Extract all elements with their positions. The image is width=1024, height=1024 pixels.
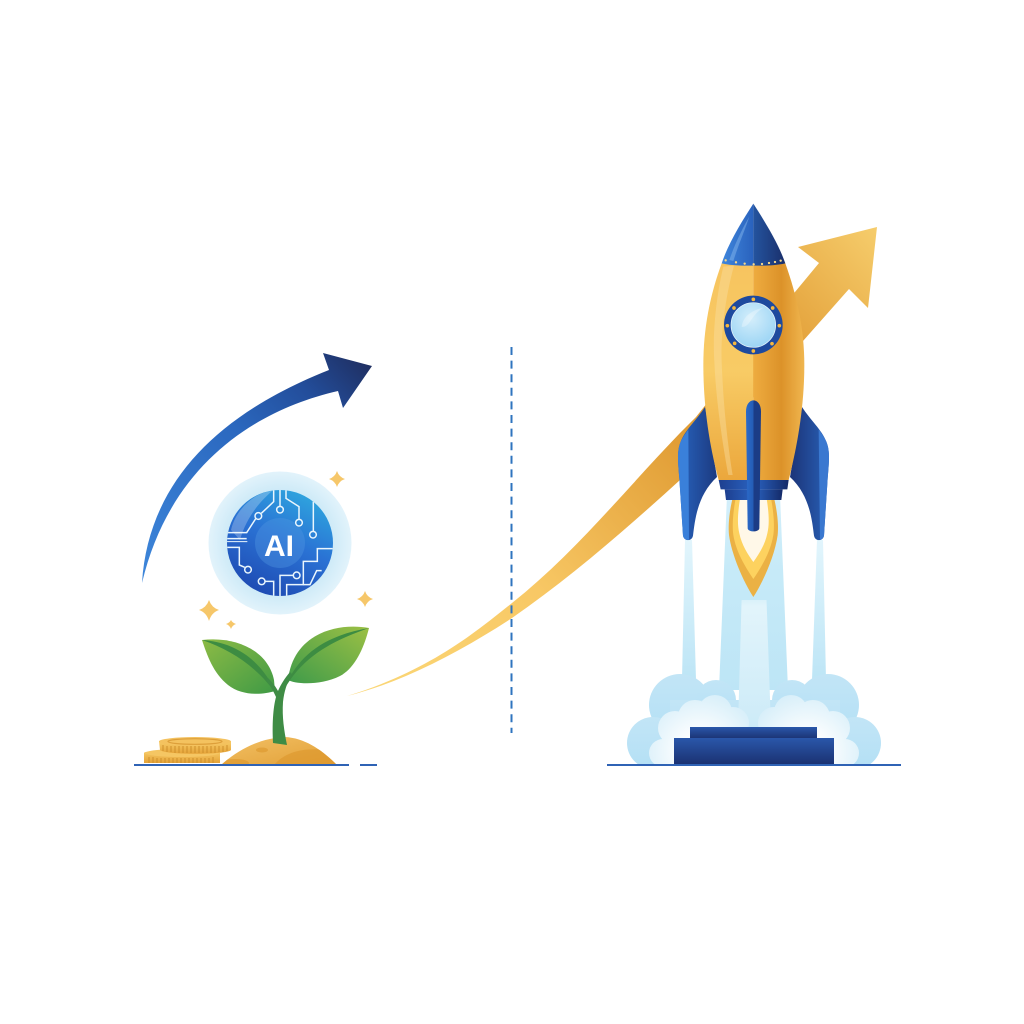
center fin	[746, 400, 761, 531]
exhaust beams	[682, 495, 826, 690]
porthole	[724, 296, 783, 354]
left leaf	[202, 639, 275, 694]
flame	[729, 497, 778, 597]
ground line: left	[134, 764, 377, 766]
orb halo	[208, 472, 352, 614]
engine bands	[719, 480, 789, 500]
icon: AI chip orb	[208, 472, 352, 614]
right fin	[790, 407, 829, 540]
arrow: gold rising growth curve	[347, 227, 877, 696]
orb core	[227, 490, 333, 596]
stem	[266, 672, 292, 745]
illustration: AI seedling to rocket growth	[134, 204, 901, 766]
arrow: blue rising curve	[142, 353, 372, 583]
nose cone	[722, 204, 753, 266]
rocket	[678, 204, 829, 597]
icon: coin stack	[144, 737, 231, 763]
divider: dashed vertical line	[510, 347, 512, 733]
inner beam	[738, 600, 770, 727]
right leaf	[288, 627, 369, 683]
upper coin	[159, 741, 231, 754]
lower coin	[144, 750, 220, 763]
launch clouds	[627, 600, 881, 764]
icon: soil mound	[222, 737, 336, 764]
launch platform	[674, 727, 834, 764]
ground line: right	[607, 764, 901, 766]
circuit traces	[227, 490, 334, 598]
label: AI: AI	[264, 530, 294, 563]
nose rivets	[724, 259, 782, 265]
left fin	[678, 407, 717, 540]
icon: seedling	[202, 627, 369, 745]
body	[703, 263, 753, 480]
icon: sparkles	[199, 471, 373, 629]
